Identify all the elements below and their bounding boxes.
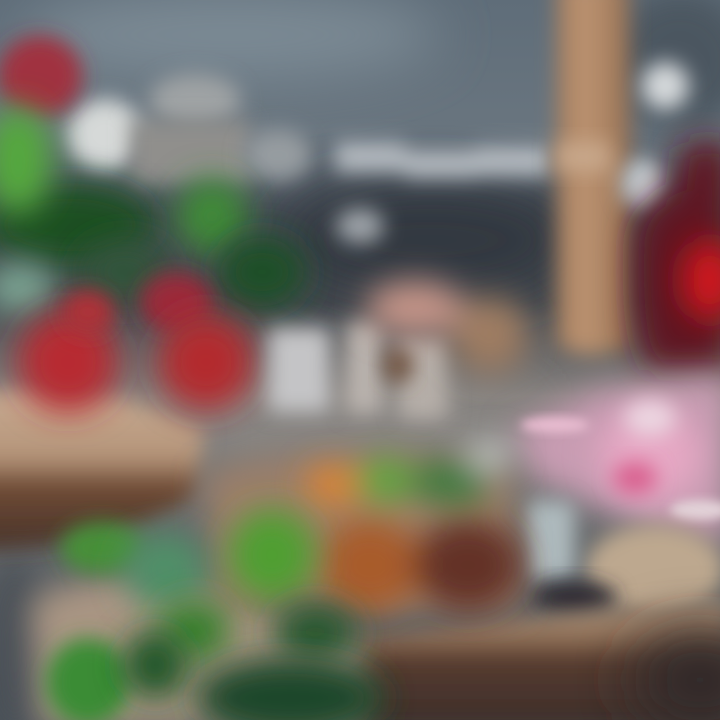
pastries: centre right bbox=[365, 280, 528, 373]
background smudges: pale blurred shapes bbox=[67, 74, 312, 185]
white blocks: centre bbox=[268, 322, 448, 420]
white spots beside post bbox=[621, 62, 689, 210]
pink ribbon napkin bbox=[510, 375, 720, 545]
carrots and nuts bbox=[306, 441, 522, 611]
green leaves: upper left bbox=[0, 106, 306, 314]
red bottle bbox=[633, 141, 720, 370]
cream bowl: right bbox=[525, 500, 720, 616]
green leaves: foreground bbox=[46, 509, 385, 720]
bowl rim and wooden base bbox=[30, 454, 720, 720]
strawberry: top left bbox=[0, 36, 82, 116]
wooden post bbox=[556, 0, 634, 355]
strawberries: on board bbox=[18, 272, 254, 412]
blurred white text band bbox=[335, 142, 551, 244]
wooden board: left bbox=[0, 390, 205, 550]
